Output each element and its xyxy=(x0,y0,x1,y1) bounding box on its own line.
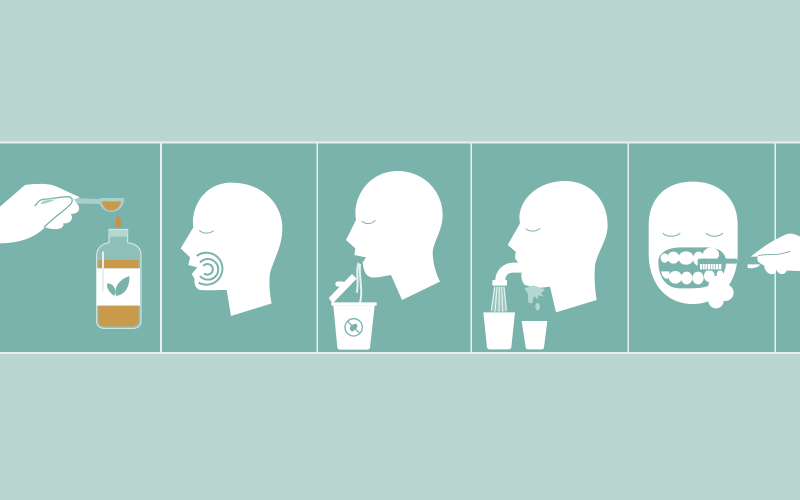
icon: closed eye xyxy=(362,220,375,224)
icon: tap xyxy=(492,263,522,286)
icon: spoon stem in hand xyxy=(41,199,56,204)
icon: leaf xyxy=(107,276,129,296)
panel 2: swishing head xyxy=(181,183,282,316)
hand crease xyxy=(758,251,790,256)
icon: water spray xyxy=(491,287,507,312)
panel 5: brushing teeth xyxy=(649,182,800,308)
icon: lower teeth xyxy=(661,270,723,284)
icon: oil drop xyxy=(115,215,121,227)
icon: tall glass xyxy=(483,312,515,349)
icon: oil bottle xyxy=(97,229,141,328)
icon: face xyxy=(649,182,738,304)
panel 1: oil spoon and bottle xyxy=(0,184,141,328)
icon: closed eyes xyxy=(663,233,723,236)
icon: short glass xyxy=(522,321,547,349)
panel 4: rinsing head xyxy=(483,181,608,349)
icon: bin with lid xyxy=(329,274,377,350)
icon: foam xyxy=(705,276,734,308)
icon: splash xyxy=(524,285,545,310)
icon: head profile xyxy=(181,183,282,316)
icon: upper teeth xyxy=(661,248,719,266)
panel strip xyxy=(0,142,800,354)
icon: spit stream xyxy=(357,263,361,303)
icon: swish rings xyxy=(197,253,222,285)
icon: hand xyxy=(0,184,80,243)
icon: toothbrush xyxy=(698,259,760,271)
icon: closed eye xyxy=(199,230,214,233)
icon: thumb crease xyxy=(35,197,72,227)
icon: closed eye xyxy=(526,228,540,231)
icon: mouth xyxy=(658,247,726,288)
panel 3: spitting head xyxy=(329,171,443,350)
icon: head profile xyxy=(346,171,443,300)
icon: spoon xyxy=(70,198,124,212)
icon: hand xyxy=(751,234,800,274)
icon: head profile xyxy=(508,181,608,312)
